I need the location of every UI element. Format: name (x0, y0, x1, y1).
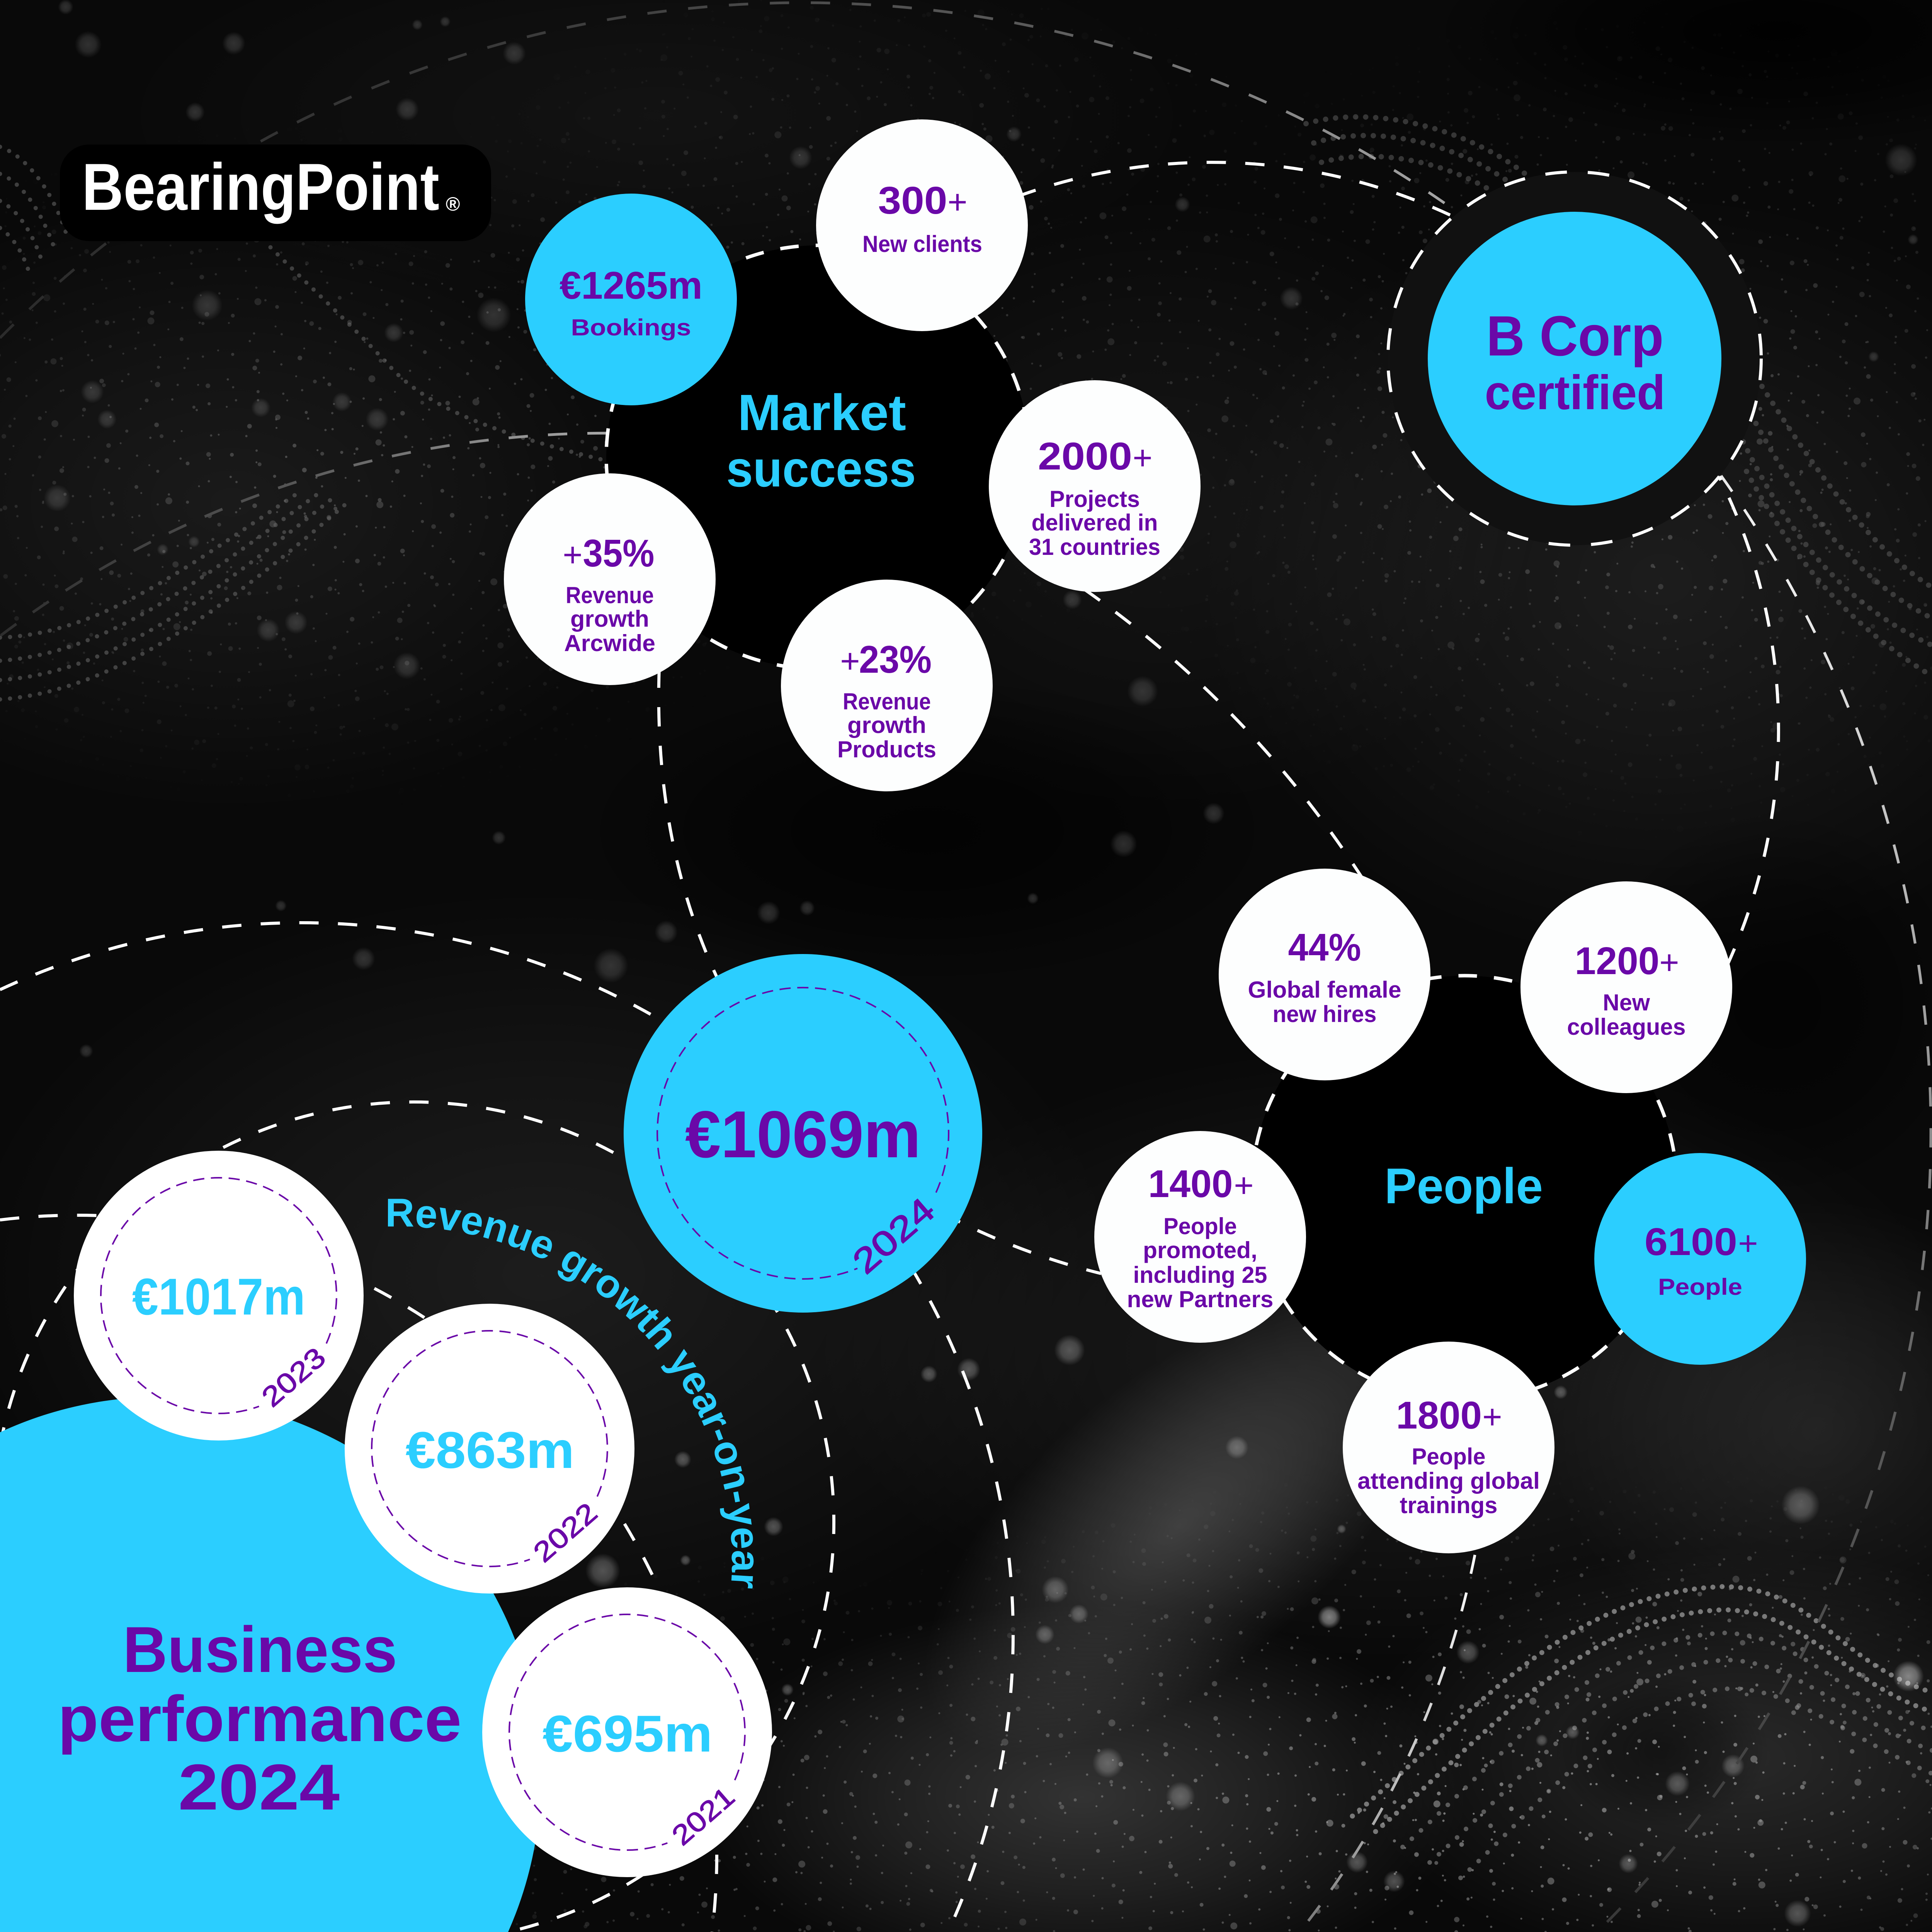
stat: new clients: New clients (862, 231, 982, 257)
stat: people promoted: People (1163, 1213, 1237, 1239)
stat: bookings: €1265m (560, 264, 702, 307)
heading: market success: Market (738, 384, 906, 441)
stat: new colleagues: + (1659, 943, 1679, 981)
stat: new clients (816, 119, 1028, 331)
panel: B Corp certified (1388, 172, 1761, 545)
stat: revenue growth products: 23% (859, 638, 932, 681)
ring linking 300+ clients, B Corp and 1200+ colleagues (1017, 162, 1779, 969)
stat: projects (989, 380, 1201, 592)
curved label: revenue growth year-on-year: Revenue growth year-on-year (385, 1190, 768, 1590)
revenue 2022: €863m (406, 1422, 574, 1479)
revenue 2023: €1017m (132, 1268, 305, 1326)
stat: total people (1594, 1153, 1806, 1365)
arc down from 1800+ trainings (1302, 1555, 1475, 1929)
heading disc: business performance 2024: performance (58, 1682, 461, 1755)
stat: global trainings: 1800 (1396, 1394, 1482, 1437)
revenue 2021: €695m (543, 1705, 713, 1763)
arc from revenue circle to 1400+ promoted (943, 1213, 1101, 1274)
stat: revenue growth products: Products (837, 736, 936, 762)
stat: people promoted: promoted, (1143, 1237, 1257, 1263)
stat: bookings: Bookings (571, 315, 691, 340)
market hub disc (606, 245, 1030, 669)
stat: revenue growth arcwide (504, 473, 716, 685)
panel: market success (504, 119, 1201, 791)
revenue 2024: €1069m (685, 1097, 921, 1172)
stat: people promoted: including 25 (1133, 1262, 1267, 1288)
ring 2 around business performance (0, 1102, 834, 1932)
stat: revenue growth products (781, 580, 993, 791)
stat: people promoted (1094, 1131, 1306, 1343)
stat: people promoted: + (1234, 1166, 1254, 1204)
stat: new colleagues: colleagues (1567, 1014, 1685, 1040)
stat: global trainings: + (1482, 1398, 1502, 1436)
revenue 2022 (345, 1304, 634, 1594)
arc from +35% to revenue circle (659, 668, 724, 993)
panel: people (1094, 869, 1806, 1553)
stat: new clients: + (947, 183, 968, 221)
logo: BearingPoint: BearingPoint (82, 150, 439, 224)
stat: global trainings: People (1412, 1444, 1485, 1469)
heading disc: business performance 2024 (0, 1397, 541, 1932)
panel: B Corp certified: B Corp (1486, 304, 1664, 368)
stat: revenue growth products: Revenue (843, 689, 931, 714)
stat: new colleagues: New (1603, 990, 1650, 1015)
stat: bookings (525, 194, 737, 405)
revenue 2022: 2022 (527, 1497, 603, 1568)
stat: revenue growth arcwide: 35% (583, 532, 655, 575)
stat: global trainings: trainings (1400, 1492, 1498, 1518)
people hub disc (1252, 976, 1677, 1401)
heading: people: People (1384, 1158, 1543, 1214)
revenue 2021 (482, 1587, 772, 1877)
stat: projects: + (1133, 439, 1153, 477)
stat: female hires (1219, 869, 1430, 1080)
stat: total people: 6100 (1645, 1220, 1737, 1264)
stat: revenue growth arcwide: Arcwide (564, 630, 655, 656)
logo: BearingPoint: ® (446, 193, 460, 215)
stat: projects: 2000 (1038, 435, 1132, 478)
stat: new clients: 300 (878, 179, 947, 222)
arc from 2000+ projects to 44% hires (1084, 589, 1362, 877)
stat: projects: Projects (1049, 486, 1140, 512)
stat: global trainings (1343, 1342, 1554, 1553)
heading disc: business performance 2024: 2024 (178, 1751, 340, 1823)
stat: revenue growth products: growth (847, 712, 926, 738)
revenue 2021: 2021 (666, 1781, 741, 1852)
stat: female hires: 44% (1288, 926, 1361, 969)
heading disc: business performance 2024: Business (123, 1613, 397, 1686)
stat: new colleagues (1520, 881, 1732, 1093)
stat: revenue growth arcwide: Revenue (566, 582, 654, 608)
revenue 2023: 2023 (256, 1342, 332, 1413)
revenue 2024: 2024 (845, 1190, 942, 1282)
stat: people promoted: new Partners (1127, 1286, 1274, 1312)
revenue 2024 (624, 954, 982, 1313)
heading: market success: success (726, 440, 916, 497)
stat: projects: 31 countries (1029, 534, 1160, 560)
stat: female hires: Global female (1248, 977, 1401, 1003)
panel: B Corp certified: certified (1485, 366, 1665, 420)
stat: revenue growth products: + (840, 642, 860, 680)
stat: global trainings: attending global (1357, 1468, 1540, 1494)
ring 4 around business performance (0, 1215, 717, 1932)
stat: revenue growth arcwide: growth (570, 606, 649, 632)
heading: market success (726, 384, 916, 497)
stat: new colleagues: 1200 (1575, 939, 1659, 983)
stat: people promoted: 1400 (1148, 1162, 1233, 1206)
stat: revenue growth arcwide: + (563, 536, 583, 574)
ring 3 around business performance (0, 923, 1013, 1932)
stat: total people: + (1738, 1224, 1758, 1262)
stat: female hires: new hires (1273, 1001, 1376, 1027)
faded arc from market success to the left edge (0, 433, 607, 636)
stat: projects: delivered in (1032, 510, 1158, 536)
stat: total people: People (1658, 1274, 1742, 1300)
panel: business performance (0, 954, 982, 1932)
revenue 2023 (74, 1151, 364, 1440)
